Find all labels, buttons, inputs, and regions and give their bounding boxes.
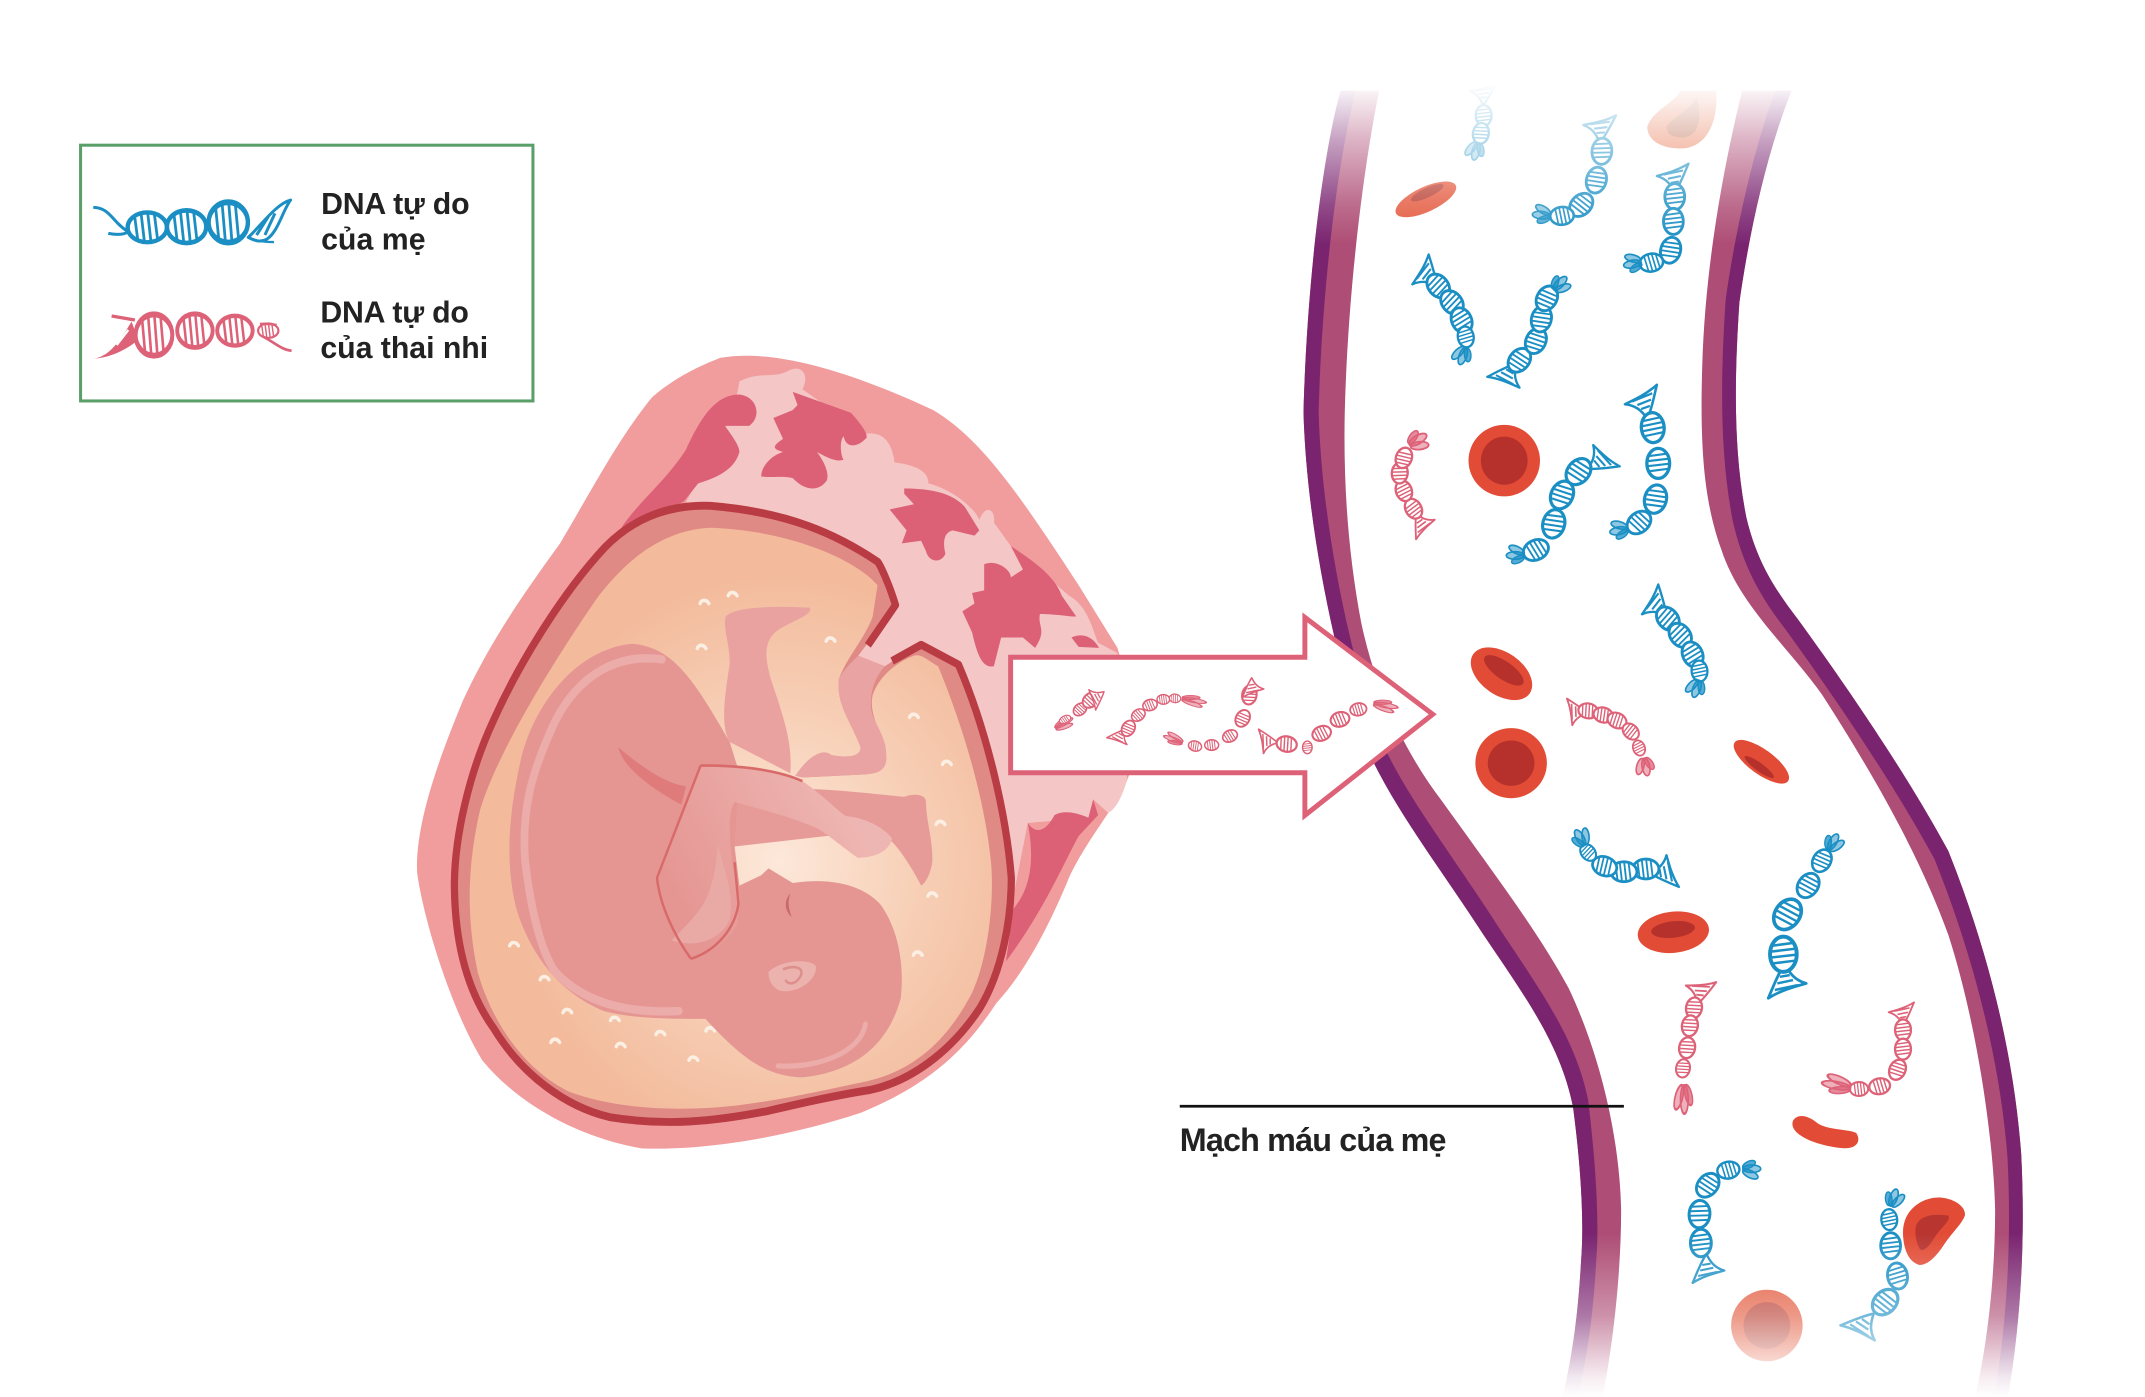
DNA strand faint top [1462, 81, 1496, 163]
DNA strand maternal 3 [1404, 254, 1476, 368]
DNA strand maternal 4 [1487, 270, 1575, 397]
arrow [1011, 617, 1433, 815]
red cell round [1468, 425, 1540, 496]
fragment 3 [1162, 678, 1264, 753]
red cell faded top [1647, 91, 1716, 148]
vessel label: Mạch máu của mẹ [1180, 1122, 1447, 1158]
uterus wall [417, 356, 1131, 1149]
limb edges [657, 765, 802, 959]
DNA strand maternal 2 [1622, 164, 1688, 275]
fragment 1 [1051, 683, 1110, 735]
legend frame [81, 145, 533, 401]
amniotic sac outline [454, 506, 1011, 1122]
red cell round lower [1475, 728, 1547, 798]
vessel right wall purple layer [1722, 91, 2023, 1397]
amniotic sac wall [452, 504, 1013, 1124]
body and head [509, 644, 902, 1077]
DNA strand maternal 8 [1567, 824, 1679, 887]
uterus with placenta and fetus [417, 356, 1131, 1149]
arrow outline [1011, 617, 1433, 815]
legend label: fetal free DNA: DNA tự do [320, 296, 469, 329]
vessel callout line [1180, 1105, 1624, 1107]
hand highlight [672, 844, 731, 943]
red cell flat [1636, 908, 1711, 956]
vessel right wall band [1702, 91, 2023, 1397]
eye [786, 893, 792, 917]
fragment 2 [1107, 692, 1207, 751]
DNA strand maternal 9 [1768, 829, 1848, 998]
DNA strand maternal 10 [1688, 1159, 1761, 1283]
legend icon: maternal free DNA [93, 200, 291, 243]
vessel fade at top [1279, 82, 1856, 245]
vessel fade at bottom [1540, 1233, 2049, 1397]
placental blood lakes [618, 392, 1099, 961]
DNA strand maternal 5 [1506, 439, 1620, 566]
back highlight [524, 658, 679, 1011]
DNA strand maternal 11 [1841, 1186, 1910, 1350]
DNA strand fetal 3 [1672, 975, 1716, 1114]
red cell narrow [1727, 732, 1795, 791]
vessel left wall band [1304, 91, 1621, 1397]
inner ear [783, 967, 801, 983]
placenta [686, 369, 1127, 956]
red cell faded bottom [1731, 1290, 1803, 1361]
fetus [509, 607, 932, 1077]
DNA strand maternal 6 [1608, 385, 1670, 542]
DNA strand maternal 7 [1634, 584, 1710, 701]
head highlight [778, 1024, 865, 1066]
DNA strand fetal 2 [1563, 699, 1657, 778]
front limb [657, 765, 892, 959]
red cell thin [1792, 1116, 1858, 1148]
rib sliver [618, 747, 686, 805]
legend label: maternal free DNA: của mẹ [321, 224, 426, 257]
blood cells and free DNA inside vessel [1391, 81, 1965, 1361]
raised leg [724, 607, 810, 773]
red cell tilted [1461, 637, 1542, 711]
rear leg [730, 789, 932, 886]
fragment 4 [1255, 697, 1399, 756]
red cell side view [1391, 174, 1461, 225]
specks in amniotic fluid [510, 593, 951, 1060]
DNA strand maternal 1 [1532, 113, 1616, 226]
arrow DNA fragments [1051, 678, 1399, 756]
legend panel [81, 145, 533, 401]
umbilical cord [795, 656, 886, 777]
ear [768, 961, 816, 991]
vessel left wall purple layer [1304, 91, 1597, 1397]
amniotic fluid [470, 528, 992, 1109]
legend label: maternal free DNA: DNA tự do [321, 188, 470, 221]
legend icon: fetal free DNA [93, 314, 292, 359]
red cell kidney [1903, 1198, 1965, 1265]
DNA strand fetal 4 [1820, 1002, 1914, 1098]
DNA strand fetal 1 [1391, 425, 1439, 539]
legend label: fetal free DNA: của thai nhi [320, 332, 488, 365]
